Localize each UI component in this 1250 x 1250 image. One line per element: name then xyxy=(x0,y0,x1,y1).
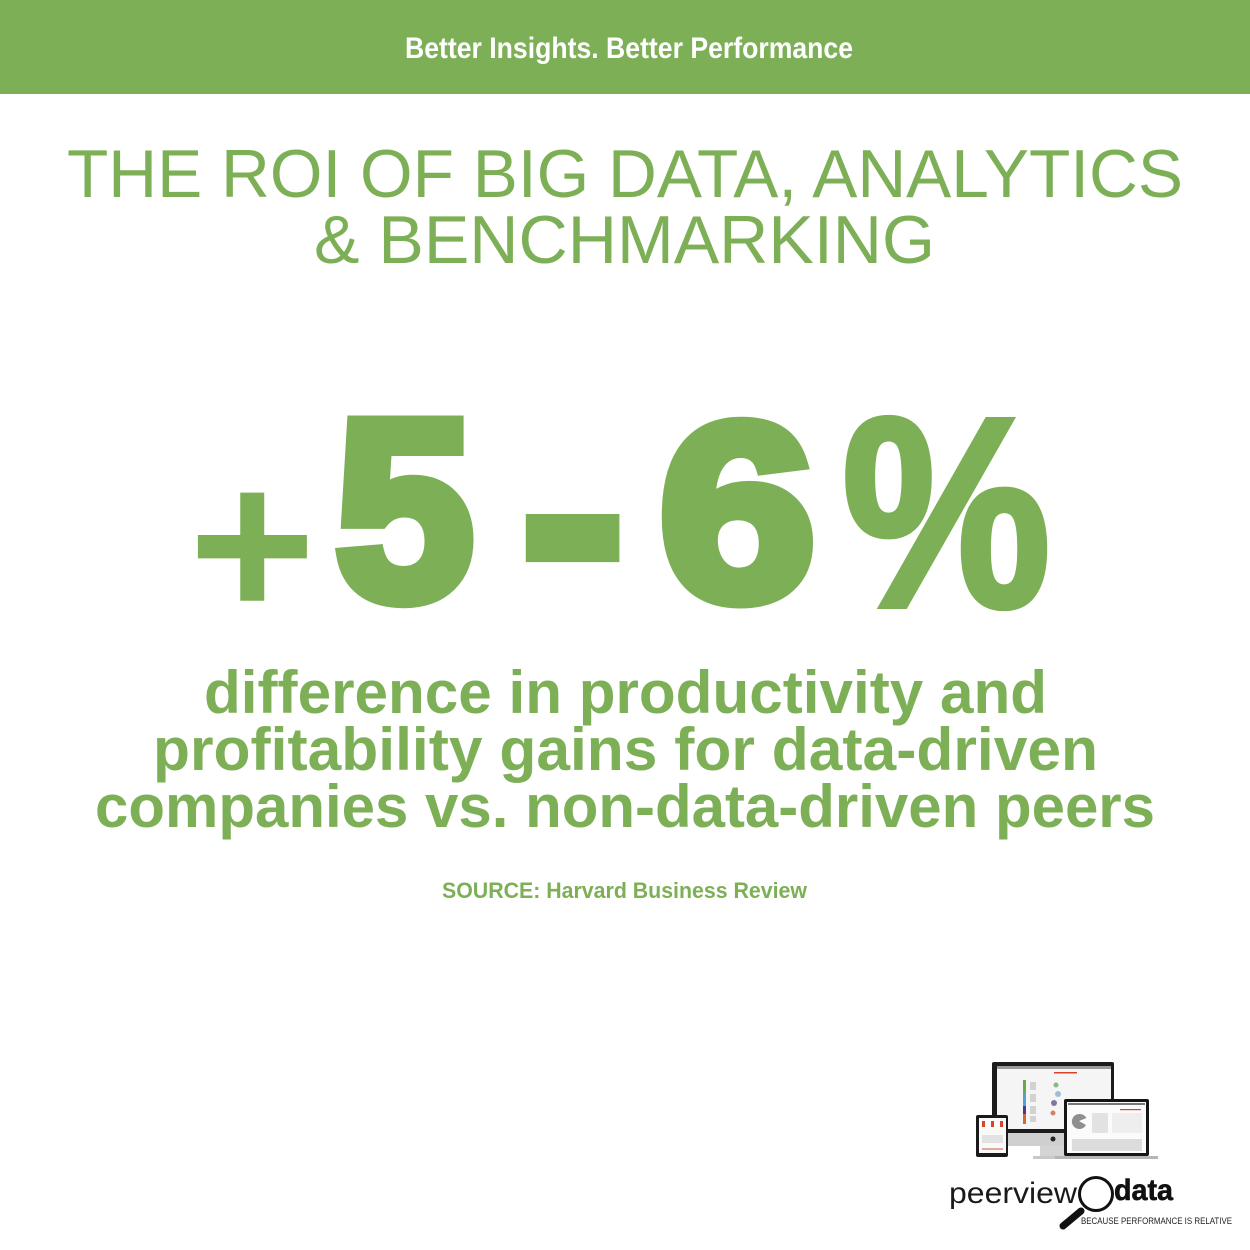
icon: laptop xyxy=(1055,1099,1158,1159)
description text: difference in productivity and xyxy=(204,659,1047,726)
brand name: peerview: peerview xyxy=(949,1177,1077,1210)
big statistic: 5 xyxy=(336,368,473,653)
logo block xyxy=(949,1062,1232,1227)
big statistic: - xyxy=(511,278,634,730)
title: & BENCHMARKING xyxy=(314,202,935,278)
icon: tablet xyxy=(976,1115,1008,1157)
icon: magnifying glass xyxy=(1063,1178,1112,1226)
description text: companies vs. non-data-driven peers xyxy=(95,773,1155,840)
title xyxy=(67,136,1183,278)
icon: desktop monitor xyxy=(992,1062,1114,1159)
description text xyxy=(95,659,1155,840)
header banner xyxy=(0,0,1250,94)
source note: SOURCE: Harvard Business Review xyxy=(442,878,808,903)
big statistic: % xyxy=(842,362,1051,664)
big statistic: 6 xyxy=(659,373,815,653)
big statistic xyxy=(189,278,1051,730)
big statistic: + xyxy=(189,424,316,663)
brand name: data: data xyxy=(1114,1174,1173,1207)
description text: profitability gains for data-driven xyxy=(153,716,1098,783)
banner tagline: Better Insights. Better Performance xyxy=(405,32,853,65)
title: THE ROI OF BIG DATA, ANALYTICS xyxy=(67,136,1183,212)
